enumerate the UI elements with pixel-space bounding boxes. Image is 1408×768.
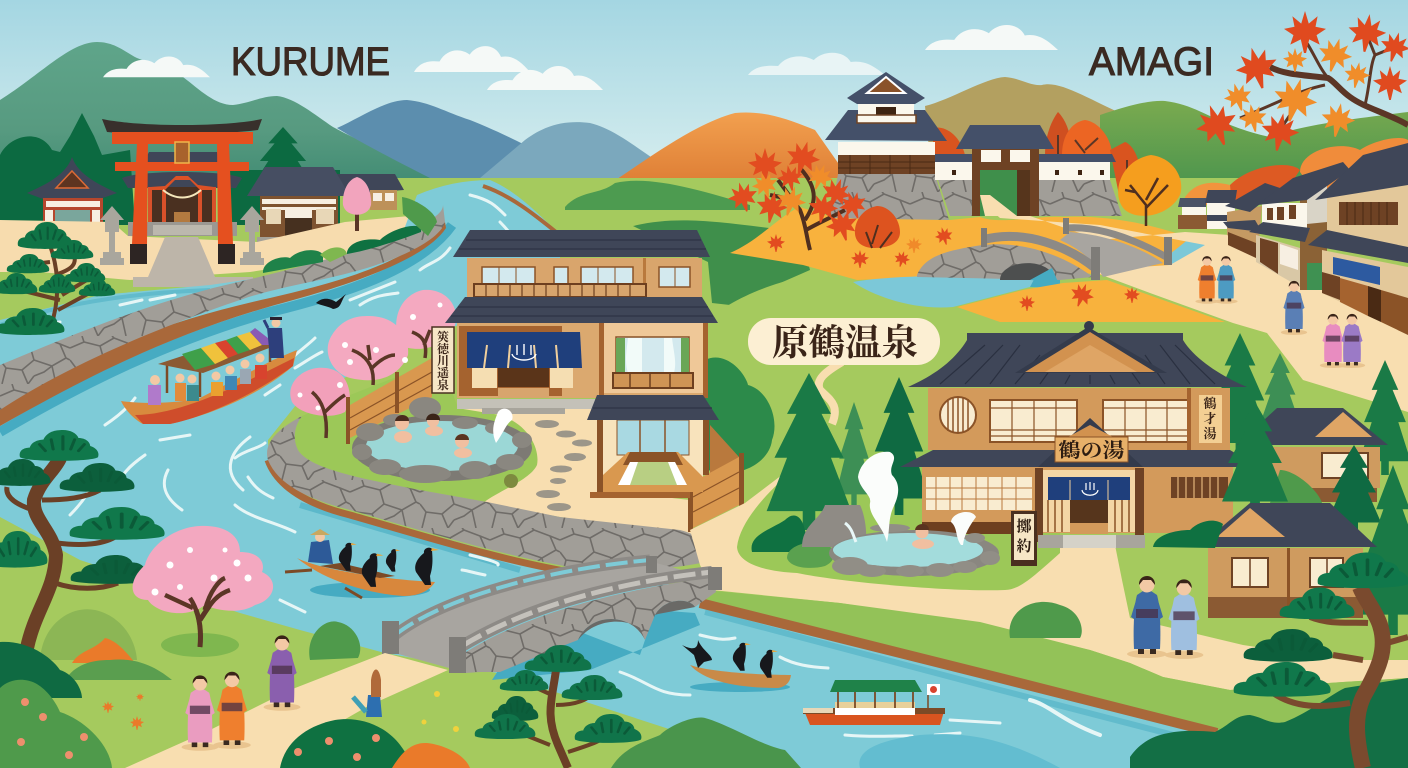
trees behind the castle: [933, 112, 1141, 200]
distant mountains: [0, 42, 1408, 210]
title Kurume: KURUME: [231, 40, 390, 84]
hotel middle roof: [445, 297, 718, 323]
bottom-left mounds behind the big pine: [40, 609, 172, 680]
cedar fence by the hotel bath: [346, 358, 432, 444]
tour boat with colourful canopy: [121, 328, 297, 424]
ryokan noren: [1048, 477, 1130, 500]
forest behind the shrine: [0, 113, 340, 225]
cottage right: [1198, 503, 1377, 618]
castle wall right: [1039, 154, 1122, 216]
hotel upper wall: [467, 258, 702, 298]
water under bridge: [492, 610, 700, 680]
hotel sign: 川: [437, 354, 449, 368]
street house 3: [1223, 183, 1280, 258]
bridge stone face: [466, 577, 716, 673]
maple tree by the castle: [725, 137, 871, 250]
flying cormorant: [316, 294, 346, 309]
torii gate: [102, 119, 262, 264]
hotel steps: [457, 399, 595, 414]
ryokan side plaque: [1199, 395, 1222, 443]
hotel sign: 徳: [437, 341, 450, 356]
second cormorant boat: [682, 640, 791, 692]
street house 1: [1308, 143, 1408, 335]
castle wall left: [935, 154, 972, 216]
river foam streaks: [30, 195, 1100, 736]
stepping stones: [535, 420, 592, 511]
far street houses: [1178, 190, 1238, 229]
hotel island ground: [295, 360, 692, 520]
hotel lower wall: [457, 322, 708, 398]
bathers: [394, 414, 472, 458]
deep water pool: [859, 734, 1060, 768]
orange tree: [1118, 155, 1181, 226]
couple in yukata: [1127, 576, 1203, 659]
green shrubs along the road: [1009, 521, 1223, 638]
hotel sign: [432, 327, 454, 393]
bottom right bush: [1130, 678, 1408, 768]
bottom centre pine: [475, 645, 641, 768]
sand courtyard: [0, 215, 445, 280]
ryokan lower wall: [922, 466, 1233, 543]
left shrine pavilion: [27, 157, 117, 237]
castle moon bridge: [917, 218, 1172, 282]
hotel sign: 泉: [437, 377, 449, 392]
tan path by hotel: [457, 408, 790, 565]
autumn foliage behind the street: [1185, 138, 1408, 205]
small frog figurine: [504, 474, 518, 488]
upper hedges behind the hotel: [565, 181, 880, 472]
main tan road: [690, 465, 1408, 690]
hotel roof ridge lines: [451, 240, 713, 408]
hotel side fence: [688, 425, 744, 532]
ryokan Tsuru no Yu: [900, 321, 1258, 548]
hotel noren curtain: [467, 332, 582, 368]
stone bridge: [382, 556, 722, 680]
bottom right pine: [1234, 552, 1408, 768]
path under the name tag: [819, 362, 842, 424]
fir in front of ryokan corner: [1222, 402, 1288, 515]
ryokan signboard: 鶴の湯: [1058, 439, 1124, 462]
name tag Harazuru Onsen: [748, 318, 940, 365]
cormorant fishing boat: [285, 529, 439, 598]
bottom left strollers: [182, 635, 300, 751]
hotel sign: 筴: [437, 329, 449, 344]
right shrine house and far house: [247, 167, 404, 242]
bather: [912, 524, 934, 549]
fallen maple leaves: [767, 225, 1140, 311]
steam: [858, 452, 976, 545]
hotel garden room: [590, 420, 709, 498]
autumn ground and stream: [730, 207, 1225, 322]
shrine hedges: [263, 197, 437, 273]
base land: [0, 178, 1408, 768]
garden hot spring: [802, 452, 1000, 577]
upper river bank: [483, 186, 556, 232]
ryokan steps: [1038, 535, 1145, 548]
cherry blossom trees: [290, 290, 456, 438]
ryokan side plaque: 鶴: [1203, 396, 1217, 411]
seated blue figure: [353, 670, 382, 717]
hotel stone embankment: [267, 416, 712, 572]
upper left pine: [0, 222, 115, 335]
ryokan side plaque: 湯: [1203, 426, 1217, 441]
ryokan signpost: [1011, 511, 1037, 566]
street house 2: [1249, 162, 1350, 290]
big cherry tree: [133, 526, 273, 657]
cedar trees centre: [767, 373, 929, 530]
ryokan main roof: [908, 321, 1247, 387]
stone approach path: [133, 237, 253, 287]
fallen leaves on the lawn: [102, 693, 144, 730]
flag boat: [803, 680, 945, 725]
ryokan upper wall: [928, 388, 1230, 450]
riverside hot spring: [352, 397, 532, 483]
steam: [493, 409, 513, 443]
castle: [825, 63, 1122, 220]
hotel upper roof: [453, 230, 710, 257]
ryokan signpost: 擲: [1016, 517, 1032, 535]
castle gate: [956, 125, 1054, 216]
ryokan side plaque: 才: [1203, 411, 1217, 426]
tan street: [980, 198, 1408, 412]
bottom centre bush: [611, 717, 801, 768]
tan path bottom left: [125, 653, 448, 768]
small cherry tree by the shrine: [343, 177, 371, 231]
hotel porch roof: [587, 395, 719, 420]
clouds: [103, 25, 1058, 90]
street pedestrians: [1195, 256, 1365, 368]
stone lanterns: [100, 206, 264, 265]
river edge shading: [0, 225, 1185, 738]
left embankment: [0, 205, 446, 426]
big left pine: [0, 430, 165, 648]
ryokan signpost: 約: [1016, 538, 1032, 555]
sky: [0, 0, 1408, 200]
river: [0, 180, 1217, 768]
shrine hall: [122, 152, 242, 236]
riverside green strip: [700, 590, 1408, 768]
title Amagi: AMAGI: [1089, 40, 1214, 84]
hotel sign: 遥: [437, 365, 449, 380]
name tag Harazuru Onsen: 原鶴温泉: [772, 322, 918, 363]
ryokan lower roof: [900, 418, 1258, 467]
bottom left bushes: [0, 621, 470, 768]
castle keep: [825, 63, 947, 174]
red bush: [855, 206, 900, 248]
garden shrubs: [752, 515, 834, 568]
garden bath island: [737, 450, 1060, 590]
hotel: [432, 230, 744, 532]
back firs and inn wing: [1210, 333, 1408, 635]
boatman on tour boat: [264, 317, 284, 358]
big maple branch top right: [1190, 11, 1408, 154]
castle stone base: [830, 174, 949, 220]
